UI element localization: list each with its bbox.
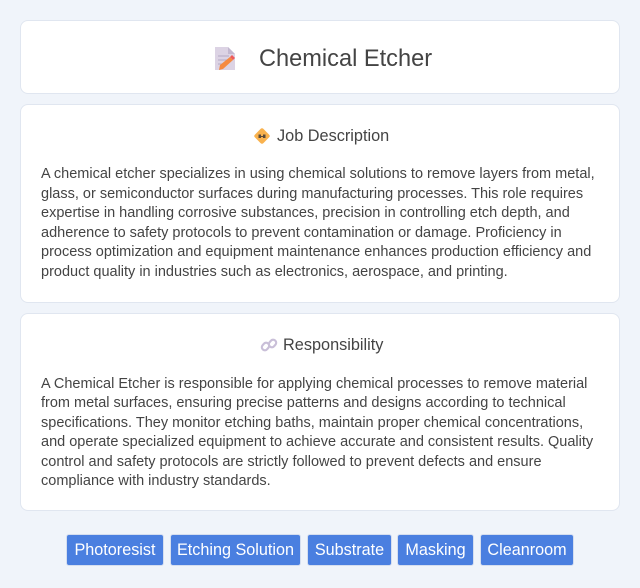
icon: document with pencil xyxy=(215,47,235,70)
tag: Substrate: Substrate xyxy=(315,541,384,559)
text block: job description: process optimization and equipment maintenance enhances production efficiency and xyxy=(41,244,591,260)
text block: responsibility: and operate specialized equipment to achieve accurate and consistent results. Quality xyxy=(41,434,593,450)
text block: responsibility: compliance with industry standards. xyxy=(41,473,271,489)
heading: responsibility: Responsibility xyxy=(283,336,383,354)
tag: Masking: Masking xyxy=(405,541,466,559)
heading: job description: Job Description xyxy=(277,127,389,145)
title: Chemical Etcher xyxy=(259,46,432,72)
text block: job description: glass, or semiconductor surfaces during manufacturing processes. This role requires xyxy=(41,186,583,202)
icon: orange diamond xyxy=(254,128,270,144)
tag: Masking xyxy=(397,534,474,566)
text block: responsibility xyxy=(41,376,594,489)
panel: responsibility xyxy=(20,313,620,511)
text block: job description: A chemical etcher specializes in using chemical solutions to remove layers from metal, xyxy=(41,166,595,182)
text block: job description: adherence to safety protocols to prevent contamination or damage. Proficiency in xyxy=(41,225,562,241)
tag: Photoresist: Photoresist xyxy=(74,541,155,559)
icon: chain link xyxy=(260,338,278,352)
panel: job description xyxy=(20,104,620,303)
text block: job description xyxy=(41,166,595,280)
tag: Photoresist xyxy=(66,534,164,566)
text block: responsibility: specifications. They monitor etching baths, maintain proper chemical concentrations, xyxy=(41,415,583,431)
tag: Cleanroom xyxy=(480,534,574,566)
text block: job description: expertise in handling corrosive substances, precision in controlling etch depth, and xyxy=(41,205,570,221)
tag: Substrate xyxy=(307,534,392,566)
text block: responsibility: control and safety protocols are strictly followed to prevent defects and ensure xyxy=(41,454,542,470)
text block: responsibility: A Chemical Etcher is responsible for applying chemical processes to remove material xyxy=(41,376,587,392)
text block: responsibility: from metal surfaces, ensuring precise patterns and designs according to technical xyxy=(41,395,566,411)
text block: job description: product quality in industries such as electronics, aerospace, and printing. xyxy=(41,264,508,280)
panel: title card xyxy=(20,20,620,94)
tag: Etching Solution: Etching Solution xyxy=(177,541,294,559)
tag: Etching Solution xyxy=(170,534,301,566)
tag: Cleanroom: Cleanroom xyxy=(487,541,567,559)
